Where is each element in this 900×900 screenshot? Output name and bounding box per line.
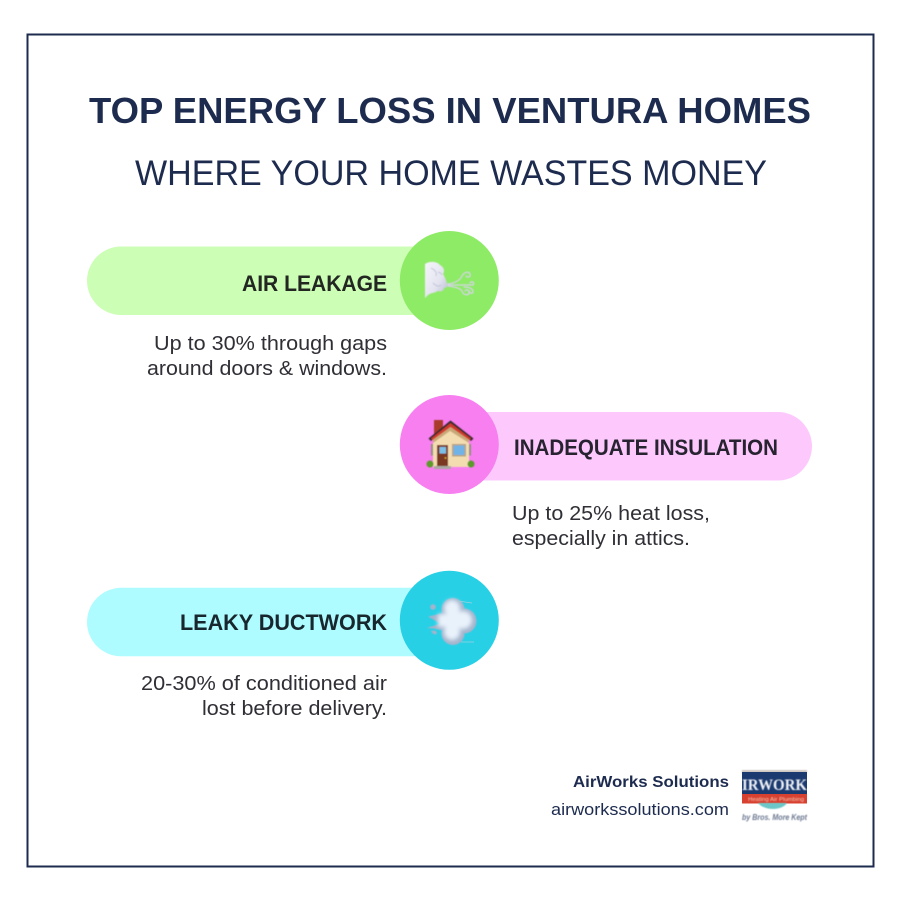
- footer brand: [551, 770, 808, 822]
- title: TOP ENERGY LOSS IN VENTURA HOMES: [89, 90, 811, 131]
- panel: leaky ductwork: [87, 571, 499, 720]
- description: air leakage: around doors & windows.: [147, 358, 387, 380]
- cloud body edge: [427, 598, 476, 645]
- website: airworkssolutions.com: [551, 801, 729, 819]
- description: inadequate insulation: especially in attics.: [512, 528, 690, 550]
- icon: house: [426, 420, 474, 469]
- logo: [742, 770, 808, 822]
- logo: by Bros. More Kept: [742, 813, 807, 822]
- cloud highlight: [438, 600, 472, 640]
- logo: Heating Air Plumbing: [748, 797, 804, 803]
- label: air leakage: AIR LEAKAGE: [242, 271, 387, 296]
- description: air leakage: [147, 333, 387, 380]
- subtitle: WHERE YOUR HOME WASTES MONEY: [135, 154, 767, 193]
- icon: dust cloud: [427, 598, 476, 645]
- icon circle: inadequate insulation: [400, 395, 499, 494]
- icon circle: air leakage: [400, 231, 499, 330]
- description: leaky ductwork: lost before delivery.: [202, 698, 387, 720]
- description: inadequate insulation: [512, 503, 710, 550]
- label pill: inadequate insulation: [452, 412, 812, 480]
- label pill: leaky ductwork: [87, 588, 447, 656]
- brand name: AirWorks Solutions: [573, 774, 729, 791]
- icon circle: leaky ductwork: [400, 571, 499, 670]
- description: inadequate insulation: Up to 25% heat loss,: [512, 503, 710, 525]
- label pill: air leakage: [87, 246, 447, 315]
- panel: air leakage: [87, 231, 499, 380]
- panel: inadequate insulation: [400, 395, 812, 550]
- label: leaky ductwork: LEAKY DUCTWORK: [180, 610, 387, 635]
- description: air leakage: Up to 30% through gaps: [154, 333, 387, 355]
- description: leaky ductwork: 20-30% of conditioned air: [141, 673, 387, 695]
- logo: IRWORK: [742, 777, 808, 794]
- label: inadequate insulation: INADEQUATE INSULATION: [514, 435, 778, 460]
- icon: blowing wind face: [425, 262, 474, 298]
- description: leaky ductwork: [141, 673, 387, 720]
